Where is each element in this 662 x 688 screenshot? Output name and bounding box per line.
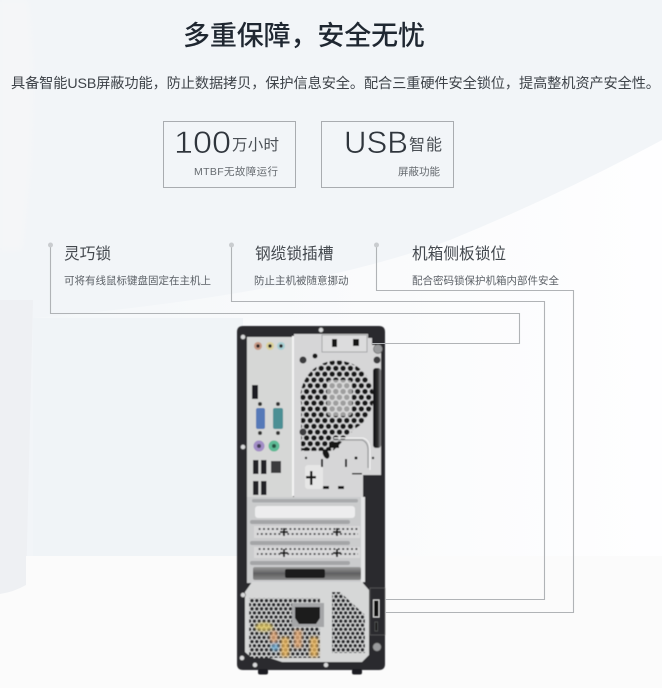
stat box: USB: 智能: [409, 136, 442, 154]
side lock plate: [322, 335, 367, 352]
vent panel: [294, 334, 381, 497]
screws: [240, 328, 382, 668]
USB and lock slot on right rail: [370, 588, 385, 635]
rear IO panel: [247, 337, 293, 497]
feet: [258, 669, 362, 674]
feature: 灵巧锁: [64, 245, 211, 287]
expansion slots: [247, 497, 363, 583]
subtitle text: 具备智能USB屏蔽功能，防止数据拷贝，保护信息安全。配合三重硬件安全锁位，提高整机资产安全性。: [11, 75, 660, 92]
feature: 灵巧锁: 可将有线鼠标键盘固定在主机上: [64, 274, 211, 287]
USB and LAN ports: [253, 460, 281, 495]
PS2 ports: [254, 440, 280, 452]
VGA port: [256, 402, 265, 435]
HDMI port: [252, 385, 258, 399]
bracket outline: [333, 440, 368, 468]
chassis body: [237, 326, 385, 670]
stat box: MTBF: MTBF无故障运行: [194, 165, 278, 178]
feature: 机箱侧板锁位: [412, 245, 559, 287]
feature: 灵巧锁: 灵巧锁: [64, 245, 111, 263]
side black vent slit: [373, 368, 381, 448]
stat box: MTBF: 万小时: [232, 136, 279, 154]
COM port: [273, 402, 283, 435]
stat box: USB: 屏蔽功能: [398, 165, 440, 178]
fan vent holes: [300, 360, 374, 452]
connector line: 机箱侧板锁位: [374, 242, 574, 612]
audio jacks: [254, 342, 285, 350]
stat box: MTBF: [164, 122, 296, 188]
title: 多重保障，安全无忧: [183, 21, 425, 51]
dark screws: [300, 354, 380, 436]
stat box: USB: [322, 122, 454, 188]
power supply: [245, 582, 369, 662]
stat box: USB: USB: [344, 124, 408, 160]
panel divider: [292, 336, 294, 496]
connector line: 钢缆锁插槽: [229, 242, 544, 600]
connector line: 灵巧锁: [48, 242, 520, 344]
bracket cut-outs: [302, 442, 374, 489]
computer tower rear view: [237, 326, 385, 674]
feature: 钢缆锁插槽: 钢缆锁插槽: [255, 245, 334, 263]
stat box: MTBF: 100: [174, 124, 231, 160]
feature: 机箱侧板锁位: 机箱侧板锁位: [412, 245, 506, 263]
feature: 机箱侧板锁位: 配合密码锁保护机箱内部件安全: [412, 274, 559, 287]
feature: 钢缆锁插槽: [254, 245, 348, 287]
right black rail: [363, 475, 385, 588]
feature: 钢缆锁插槽: 防止主机被随意挪动: [254, 274, 348, 287]
